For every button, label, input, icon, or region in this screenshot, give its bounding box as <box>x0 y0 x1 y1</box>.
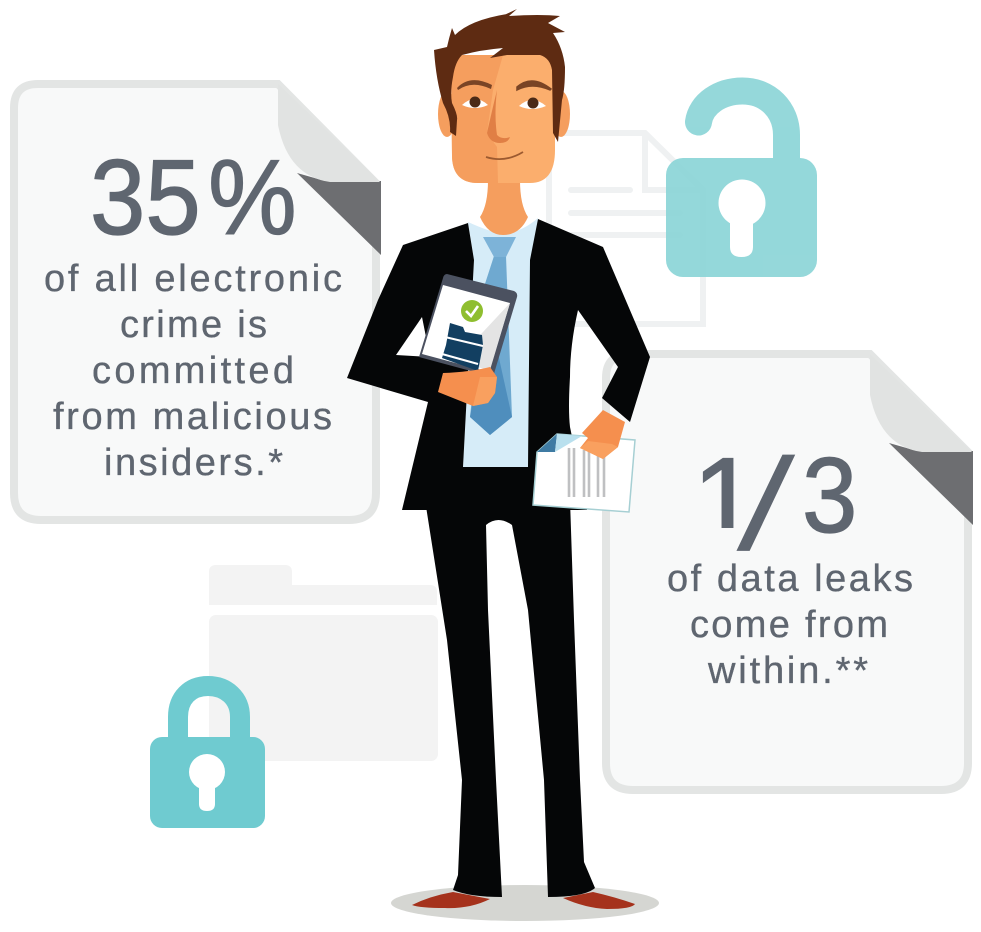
background folder icon <box>209 565 438 761</box>
statistic text: within.** <box>707 650 868 692</box>
page fold <box>278 84 381 255</box>
background document icon <box>549 133 703 324</box>
big number: 1/3: 3 <box>802 435 857 555</box>
shirt <box>463 218 540 467</box>
shoes <box>412 892 635 909</box>
neck <box>480 180 528 235</box>
character: businessman <box>347 9 659 921</box>
eyebrows <box>457 80 492 90</box>
tie <box>470 237 516 435</box>
folder stack on screen <box>442 323 483 371</box>
panel: 35% statistic note <box>14 84 381 520</box>
icon: closed padlock <box>150 686 265 828</box>
statistic text: of data leaks <box>667 558 913 600</box>
gap under arm <box>396 317 430 357</box>
page fold <box>870 354 973 525</box>
right hand <box>580 410 625 459</box>
nose <box>487 90 510 143</box>
statistic text: crime is <box>120 304 267 346</box>
face <box>451 55 555 183</box>
ground shadow <box>391 885 659 921</box>
ears <box>438 91 570 137</box>
panel: 1/3 statistic note <box>606 354 973 790</box>
statistic text <box>44 258 342 484</box>
statistic text <box>667 558 913 692</box>
left hand on tablet <box>438 367 497 406</box>
paper in hand <box>533 434 635 512</box>
mouth <box>486 152 523 159</box>
eyes <box>462 96 546 109</box>
big number: 1/3: 1 <box>692 433 759 567</box>
big number: 1/3 <box>702 454 854 551</box>
statistic text: insiders.* <box>104 442 283 484</box>
trousers <box>425 500 595 897</box>
statistic text: from malicious <box>53 396 332 438</box>
tablet <box>419 274 517 377</box>
check badge <box>461 300 483 322</box>
statistic text: come from <box>690 604 888 646</box>
icon: open padlock <box>666 91 817 277</box>
big number: 35%: 35% <box>90 137 297 257</box>
jacket <box>347 219 650 510</box>
statistic text: of all electronic <box>44 258 342 300</box>
statistic text: committed <box>92 350 294 392</box>
big number: 1/3: / <box>733 429 799 580</box>
hair <box>434 9 565 142</box>
